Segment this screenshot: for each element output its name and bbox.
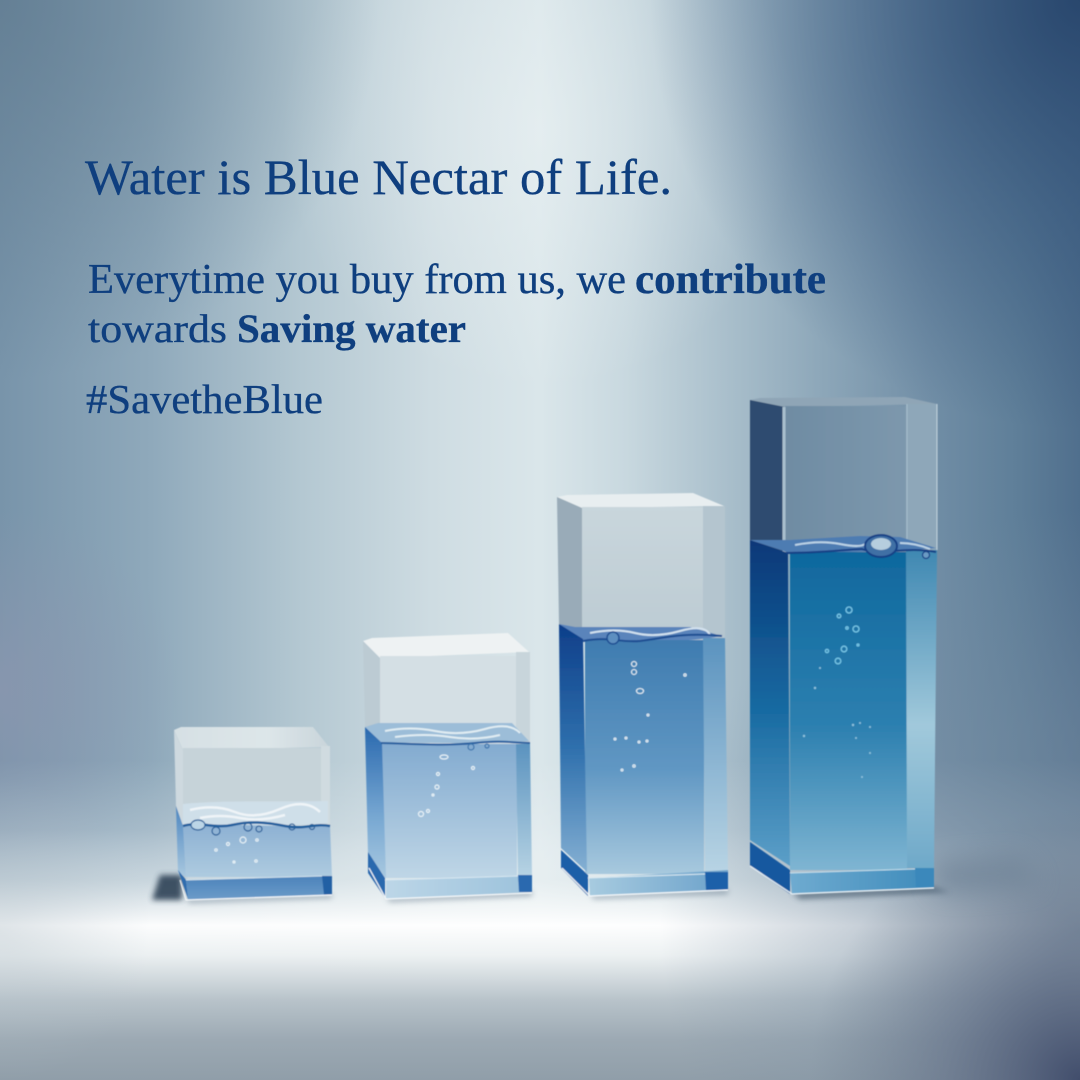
water surface [750, 536, 936, 553]
glass base [790, 868, 934, 894]
water body [585, 640, 704, 874]
water surface [183, 801, 328, 828]
glass base [186, 876, 330, 900]
subheading text: Saving water [237, 306, 466, 351]
chart: block 3 [557, 493, 728, 896]
subheading text: contribute [635, 257, 826, 303]
water surface [559, 624, 722, 641]
large bubble [865, 535, 930, 558]
hashtag: #SavetheBlue [86, 376, 323, 422]
water body [183, 825, 332, 877]
glass base [589, 870, 728, 896]
glass base [386, 875, 532, 899]
water body [382, 744, 517, 878]
chart: block 1, smallest water level [174, 727, 332, 900]
title: Water is Blue Nectar of Life. [85, 149, 672, 205]
water body [790, 552, 907, 870]
subheading text [88, 257, 826, 351]
chart: block 4, tallest water level [750, 397, 937, 894]
subheading text: Everytime you buy from us, we [88, 257, 626, 303]
floor shadows [152, 856, 1040, 903]
chart: block 2 [363, 633, 532, 899]
water surface [365, 723, 529, 743]
subheading text: towards [88, 306, 227, 351]
